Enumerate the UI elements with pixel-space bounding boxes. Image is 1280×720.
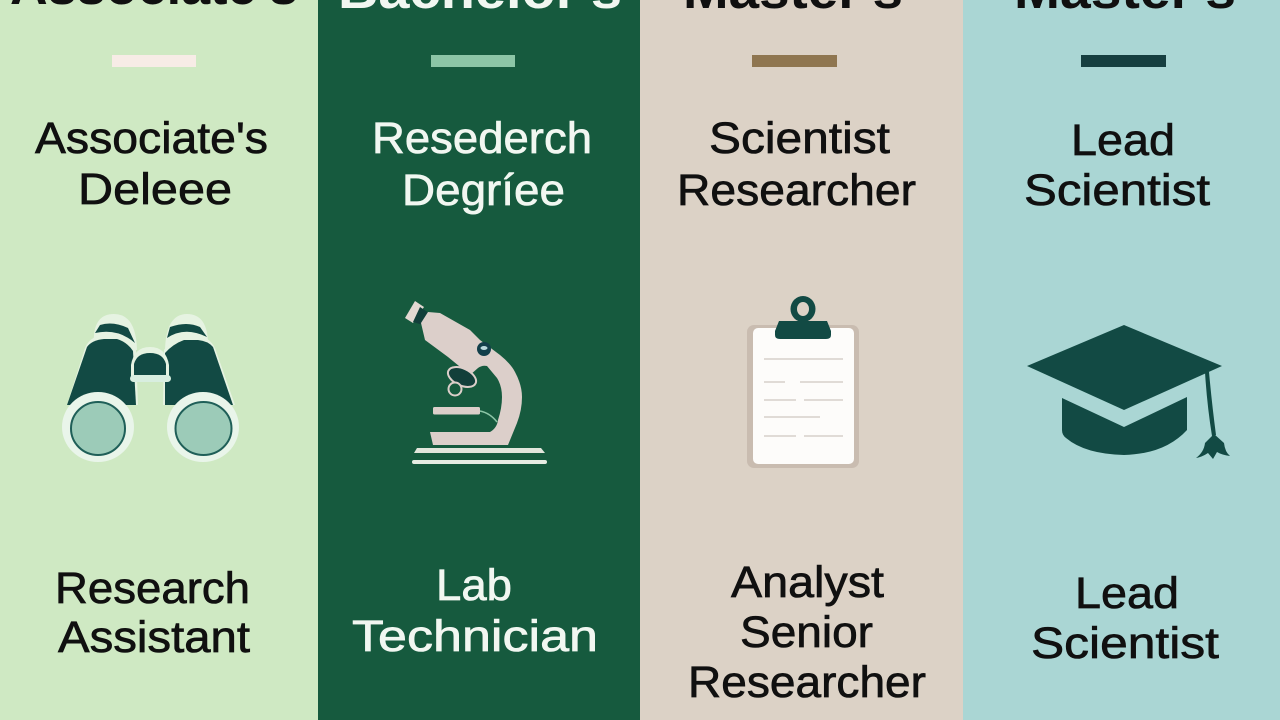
job titles: advanced master's: Scientist: [1031, 619, 1219, 668]
job titles: bachelor's: [352, 561, 598, 661]
degree label: associate's: Associate's: [35, 114, 268, 163]
accent bar: associate's: [112, 55, 196, 67]
job titles: bachelor's: Lab: [436, 561, 512, 610]
panel: associate's column: [0, 0, 318, 720]
job titles: master's: [688, 558, 926, 707]
degree label: bachelor's: Degríee: [402, 166, 565, 215]
role label: master's: Scientist: [709, 114, 890, 163]
accent bar: master's: [752, 55, 837, 67]
degree label: associate's: [35, 114, 268, 214]
panel: advanced master's column: [963, 0, 1280, 720]
role label: advanced master's: Scientist: [1024, 166, 1210, 215]
job titles: master's: Researcher: [688, 658, 926, 707]
icon: microscope: [405, 301, 547, 464]
job titles: advanced master's: Lead: [1075, 569, 1179, 618]
accent bar: bachelor's: [431, 55, 515, 67]
role label: advanced master's: [1024, 116, 1210, 215]
role label: master's: [677, 114, 916, 215]
job titles: associate's: Research: [55, 564, 250, 613]
role label: master's: Researcher: [677, 166, 916, 215]
job titles: bachelor's: Technician: [352, 612, 598, 661]
icon: binoculars: [62, 314, 239, 462]
panel: bachelor's column: [318, 0, 640, 720]
icon: clipboard: [747, 296, 859, 468]
job titles: associate's: [55, 564, 250, 662]
job titles: advanced master's: [1031, 569, 1219, 668]
job titles: associate's: Assistant: [58, 613, 250, 662]
degree label: bachelor's: [372, 114, 592, 215]
accent bar: advanced master's: [1081, 55, 1166, 67]
panel: master's column: [640, 0, 963, 720]
icon: graduation cap: [1027, 325, 1230, 459]
degree label: bachelor's: Resederch: [372, 114, 592, 163]
job titles: master's: Senior: [740, 608, 873, 657]
degree label: associate's: Deleee: [78, 165, 232, 214]
role label: advanced master's: Lead: [1071, 116, 1175, 165]
job titles: master's: Analyst: [731, 558, 884, 607]
